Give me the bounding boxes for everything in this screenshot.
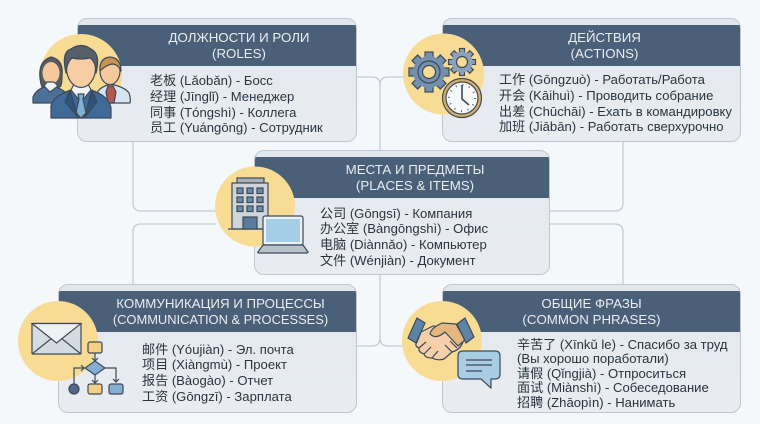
text block: roles vocabulary: 老板 (Lǎobǎn) - Босс <box>150 73 273 88</box>
text block: actions vocabulary: 出差 (Chūchāi) - Ехать в командировку <box>499 104 732 118</box>
large gear <box>409 52 449 92</box>
building <box>228 178 268 229</box>
text block: roles vocabulary: 员工 (Yuángōng) - Сотрудник <box>150 120 323 135</box>
text block: roles vocabulary <box>150 73 323 135</box>
handshake <box>408 318 474 360</box>
heading: roles <box>77 25 357 66</box>
man on right <box>98 57 130 103</box>
text block: places vocabulary: 文件 (Wénjiàn) - Документ <box>320 253 476 268</box>
heading: common phrases: (COMMON PHRASES) <box>522 312 661 327</box>
envelope <box>32 324 81 354</box>
clock <box>442 78 482 118</box>
text block: communication vocabulary <box>142 342 294 404</box>
heading: places and items: (PLACES & ITEMS) <box>356 178 474 193</box>
text block: places vocabulary: 办公室 (Bàngōngshì) - Офис <box>320 221 488 236</box>
text block: actions vocabulary: 加班 (Jiābān) - Работать сверхурочно <box>499 119 723 134</box>
heading: communication and processes: (COMMUNICATION & PROCESSES) <box>113 312 328 327</box>
text block: communication vocabulary: 邮件 (Yóujiàn) - Эл. почта <box>142 342 294 356</box>
panel: communication and processes <box>58 284 357 413</box>
heading: common phrases <box>442 291 741 332</box>
panel: places and items <box>254 150 550 275</box>
text block: actions vocabulary: 开会 (Kāihuì) - Проводить собрание <box>499 88 713 103</box>
text block: common phrases vocabulary: 辛苦了 (Xīnkǔ le) - Спасибо за труд <box>517 336 728 352</box>
text block: communication vocabulary: 报告 (Bàogào) - Отчет <box>142 373 273 388</box>
woman on left <box>33 57 68 103</box>
text block: roles vocabulary: 经理 (Jīnglǐ) - Менеджер <box>150 89 294 104</box>
text block: common phrases vocabulary: 请假 (Qǐngjià) - Отпроситься <box>517 366 686 380</box>
panel: common phrases <box>442 284 741 413</box>
text block: places vocabulary: 电脑 (Diànnǎo) - Компьютер <box>320 237 487 252</box>
text block: places vocabulary <box>320 206 488 268</box>
text block: actions vocabulary <box>499 72 732 134</box>
flowchart <box>69 342 123 394</box>
heading: places and items: МЕСТА И ПРЕДМЕТЫ <box>346 162 484 176</box>
small gear <box>448 48 476 76</box>
text block: actions vocabulary: 工作 (Gōngzuò) - Работать/Работа <box>499 72 705 87</box>
heading: actions: ДЕЙСТВИЯ <box>568 30 641 44</box>
heading: actions: (ACTIONS) <box>571 46 638 61</box>
heading: common phrases: ОБЩИЕ ФРАЗЫ <box>541 296 642 310</box>
laptop <box>258 216 308 253</box>
panel: roles <box>77 18 357 142</box>
heading: roles: ДОЛЖНОСТИ И РОЛИ <box>168 30 310 44</box>
heading: communication and processes: КОММУНИКАЦИЯ И ПРОЦЕССЫ <box>116 296 325 310</box>
text block: common phrases vocabulary <box>517 336 728 410</box>
speech bubble <box>458 351 500 388</box>
heading: actions <box>442 25 741 66</box>
text block: common phrases vocabulary: 招聘 (Zhāopìn) - Нанимать <box>517 394 675 410</box>
heading: communication and processes <box>58 291 357 332</box>
text block: places vocabulary: 公司 (Gōngsī) - Компания <box>320 206 472 220</box>
heading: places and items <box>254 157 550 198</box>
text block: common phrases vocabulary: 面试 (Miànshì) - Собеседование <box>517 380 709 395</box>
panel: actions <box>442 18 741 142</box>
text block: communication vocabulary: 项目 (Xiàngmù) - Проект <box>142 357 287 372</box>
man in the centre <box>51 46 111 118</box>
text block: communication vocabulary: 工资 (Gōngzī) - Зарплата <box>142 389 292 404</box>
heading: roles: (ROLES) <box>212 46 266 61</box>
text block: roles vocabulary: 同事 (Tóngshì) - Коллега <box>150 104 296 120</box>
text block: common phrases vocabulary: (Вы хорошо поработали) <box>517 351 669 366</box>
